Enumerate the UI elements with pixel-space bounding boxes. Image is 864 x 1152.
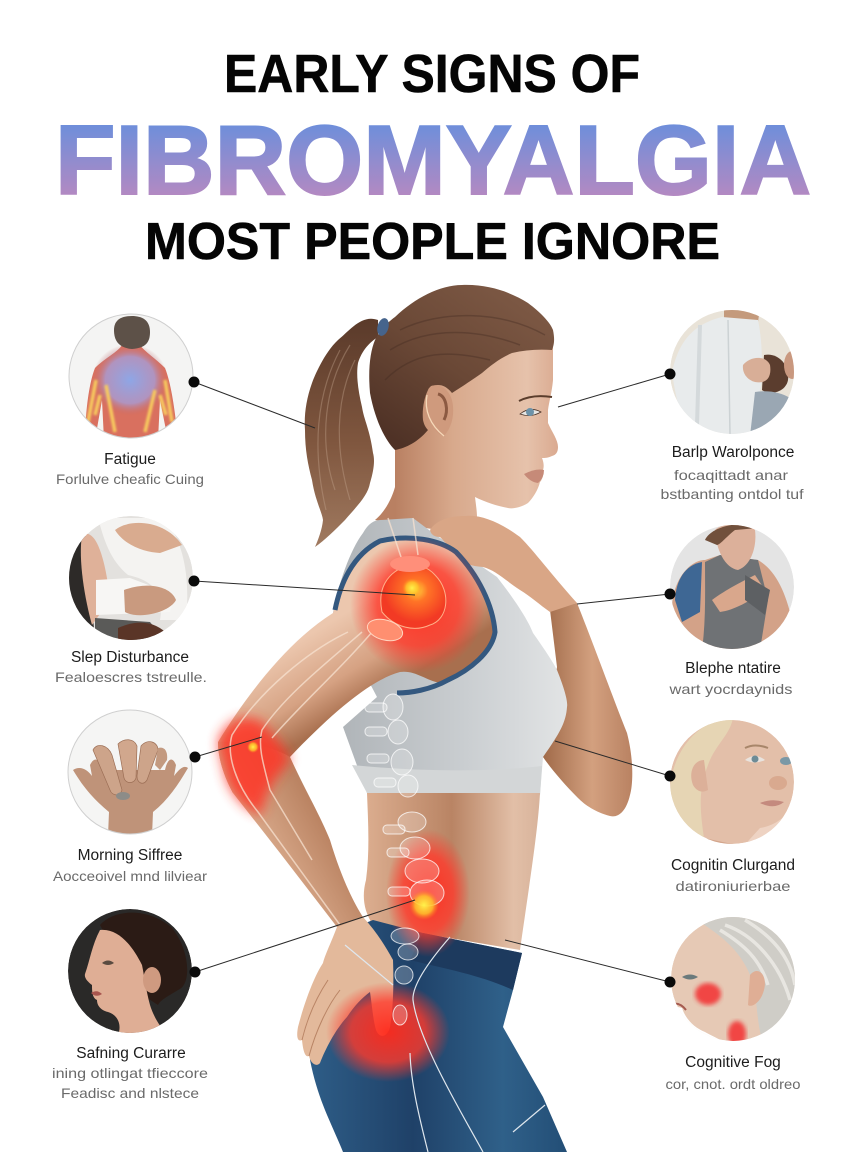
photo: woman holding shoulder xyxy=(670,524,794,650)
right item 2: blephe ntatire xyxy=(668,524,794,697)
left item 1: fatigue xyxy=(56,314,204,487)
description: datironiurierbae xyxy=(676,878,791,894)
right item 1: barlp warolponce xyxy=(660,308,804,502)
ponytail xyxy=(305,319,378,547)
left item 2: sleep disturbance xyxy=(55,516,207,685)
central figure: woman in profile with highlighted pain areas xyxy=(218,285,632,1152)
shorts seams xyxy=(345,937,545,1152)
label: Slep Disturbance xyxy=(71,649,189,666)
forearm xyxy=(218,742,393,960)
label: Blephe ntatire xyxy=(685,660,781,677)
upper arm xyxy=(218,538,494,793)
title line: fibromyalgia: FIBROMYALGIA xyxy=(55,105,811,215)
photo: blonde woman portrait xyxy=(670,718,796,850)
waistband shadow xyxy=(410,933,522,990)
arm bones xyxy=(230,518,418,925)
ear xyxy=(426,385,453,436)
spine xyxy=(365,694,444,1025)
photo: glowing back xyxy=(69,314,193,440)
lower back pain glow xyxy=(386,829,470,957)
navy armhole trim xyxy=(335,538,495,693)
title line: most people ignore: MOST PEOPLE IGNORE xyxy=(145,213,720,271)
shoulder joint xyxy=(365,556,446,644)
sports top xyxy=(333,518,567,797)
photo: hands on bandaged torso xyxy=(69,516,193,640)
elbow hot spot xyxy=(247,741,259,753)
shoulder hand xyxy=(430,516,577,612)
label: Morning Siffree xyxy=(78,847,182,864)
label: Cognitive Fog xyxy=(685,1054,781,1071)
top hem xyxy=(352,765,542,797)
description: Aocceoivel mnd lilviear xyxy=(53,868,207,884)
description: Fealoescres tstreulle. xyxy=(55,669,207,685)
neck and face xyxy=(375,345,558,535)
eye and brow xyxy=(519,396,552,416)
description line 1: focaqittadt anar xyxy=(674,467,788,483)
description: Forlulve cheafic Cuing xyxy=(56,471,204,487)
photo: clinician with patient xyxy=(670,308,800,436)
photo: silver-haired woman with red facial patches xyxy=(670,914,796,1047)
far arm xyxy=(543,603,632,816)
description line 2: Feadisc and nlstece xyxy=(61,1085,199,1101)
elbow pain glow xyxy=(218,718,290,815)
right item 4: cognitive fog xyxy=(666,914,801,1092)
lips xyxy=(524,470,544,483)
title xyxy=(55,44,811,271)
hip pain glow xyxy=(326,982,450,1082)
description: wart yocrdaynids xyxy=(668,681,792,697)
lower back hot spot xyxy=(409,890,439,920)
label: Fatigue xyxy=(104,451,156,468)
description: cor, cnot. ordt oldreo xyxy=(666,1076,801,1092)
photo: clasped hands xyxy=(68,710,192,836)
left item 3: morning stiffness xyxy=(53,710,207,884)
photo: woman in profile on dark background xyxy=(68,909,192,1035)
label: Safning Curarre xyxy=(76,1045,186,1062)
title line: early signs of: EARLY SIGNS OF xyxy=(224,44,640,104)
connector end dots xyxy=(188,368,676,988)
ring xyxy=(69,314,193,438)
hair tie xyxy=(375,317,391,337)
shoulder pain glow xyxy=(350,537,486,673)
description line 2: bstbanting ontdol tuf xyxy=(660,486,804,502)
hair strands xyxy=(385,316,545,380)
head hair xyxy=(369,285,554,450)
ponytail strands xyxy=(318,345,355,510)
right item 3: cognitin clurgand xyxy=(670,718,796,894)
hip hand xyxy=(297,917,393,1065)
midriff xyxy=(364,793,540,950)
description line 1: ining otlingat tfieccore xyxy=(52,1065,208,1081)
label: Barlp Warolponce xyxy=(672,444,794,461)
ring xyxy=(68,710,192,834)
label: Cognitin Clurgand xyxy=(671,857,795,874)
left item 4: satning curarre xyxy=(52,909,208,1101)
shorts xyxy=(310,920,567,1152)
connector lines xyxy=(194,374,670,982)
